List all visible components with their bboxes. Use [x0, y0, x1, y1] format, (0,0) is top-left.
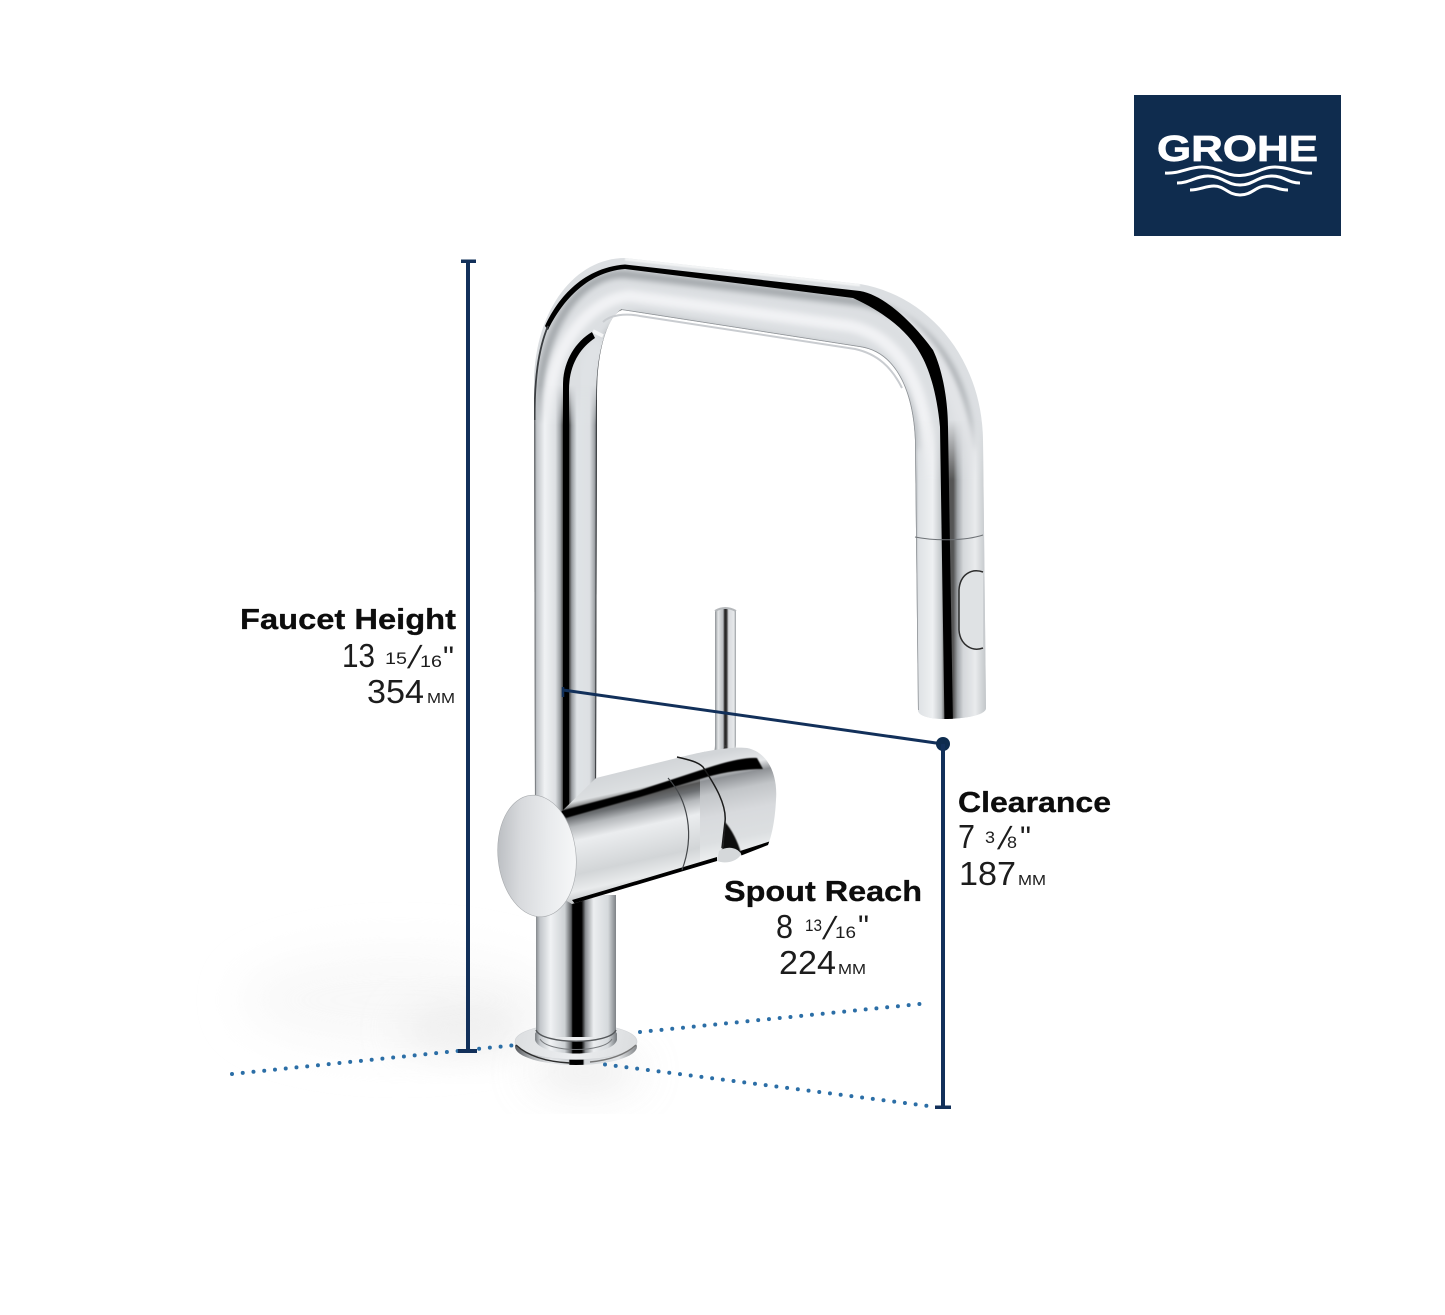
- spout shading: [540, 259, 972, 480]
- inner edge reflection: [603, 315, 902, 388]
- label: clearance: /: [995, 820, 1015, 856]
- label: spout reach: Spout Reach: [724, 876, 922, 908]
- label: spout reach: 8: [776, 908, 793, 945]
- label: clearance: 7: [958, 818, 975, 855]
- label: spout reach: 13: [805, 916, 822, 935]
- dimension line: spout reach: [563, 687, 943, 744]
- dotted floor lines: [232, 1003, 936, 1107]
- stem and base: [515, 895, 637, 1065]
- label: spout reach: [724, 876, 922, 981]
- label: clearance: 8: [1007, 833, 1017, 852]
- end cap of handle body: [492, 791, 582, 921]
- label: faucet height: 13: [342, 637, 375, 674]
- valve body: [562, 748, 776, 904]
- dimension line: faucet height: [458, 260, 477, 1053]
- label: faucet height: 354: [367, 673, 424, 710]
- label: clearance: [958, 787, 1111, 892]
- logo: GROHE: GROHE: [1157, 128, 1318, 169]
- label: clearance: MM: [1018, 872, 1046, 889]
- dimension line: clearance: [935, 737, 951, 1109]
- label: faucet height: [240, 604, 456, 710]
- faucet spout: [530, 250, 990, 815]
- lever handle: [703, 608, 736, 772]
- label: spout reach: 224: [779, 944, 836, 981]
- label: faucet height: MM: [427, 690, 455, 707]
- label: clearance: 187: [959, 855, 1016, 892]
- label: spout reach: 16: [835, 923, 856, 942]
- label: faucet height: 16: [420, 652, 442, 671]
- spray head seam: [915, 535, 983, 540]
- label: faucet height: 15: [385, 649, 407, 668]
- floor shadow: [240, 950, 640, 1086]
- spray button: [959, 571, 983, 649]
- label: spout reach: MM: [838, 961, 866, 978]
- label: faucet height: Faucet Height: [240, 604, 456, 636]
- label: spout reach: ": [858, 910, 869, 943]
- label: faucet height: /: [405, 639, 425, 675]
- label: spout reach: /: [820, 910, 840, 946]
- label: clearance: Clearance: [958, 787, 1111, 819]
- label: faucet height: ": [443, 641, 454, 674]
- label: clearance: ": [1020, 821, 1031, 854]
- label: clearance: 3: [985, 828, 995, 847]
- logo: GROHE: [1134, 95, 1341, 236]
